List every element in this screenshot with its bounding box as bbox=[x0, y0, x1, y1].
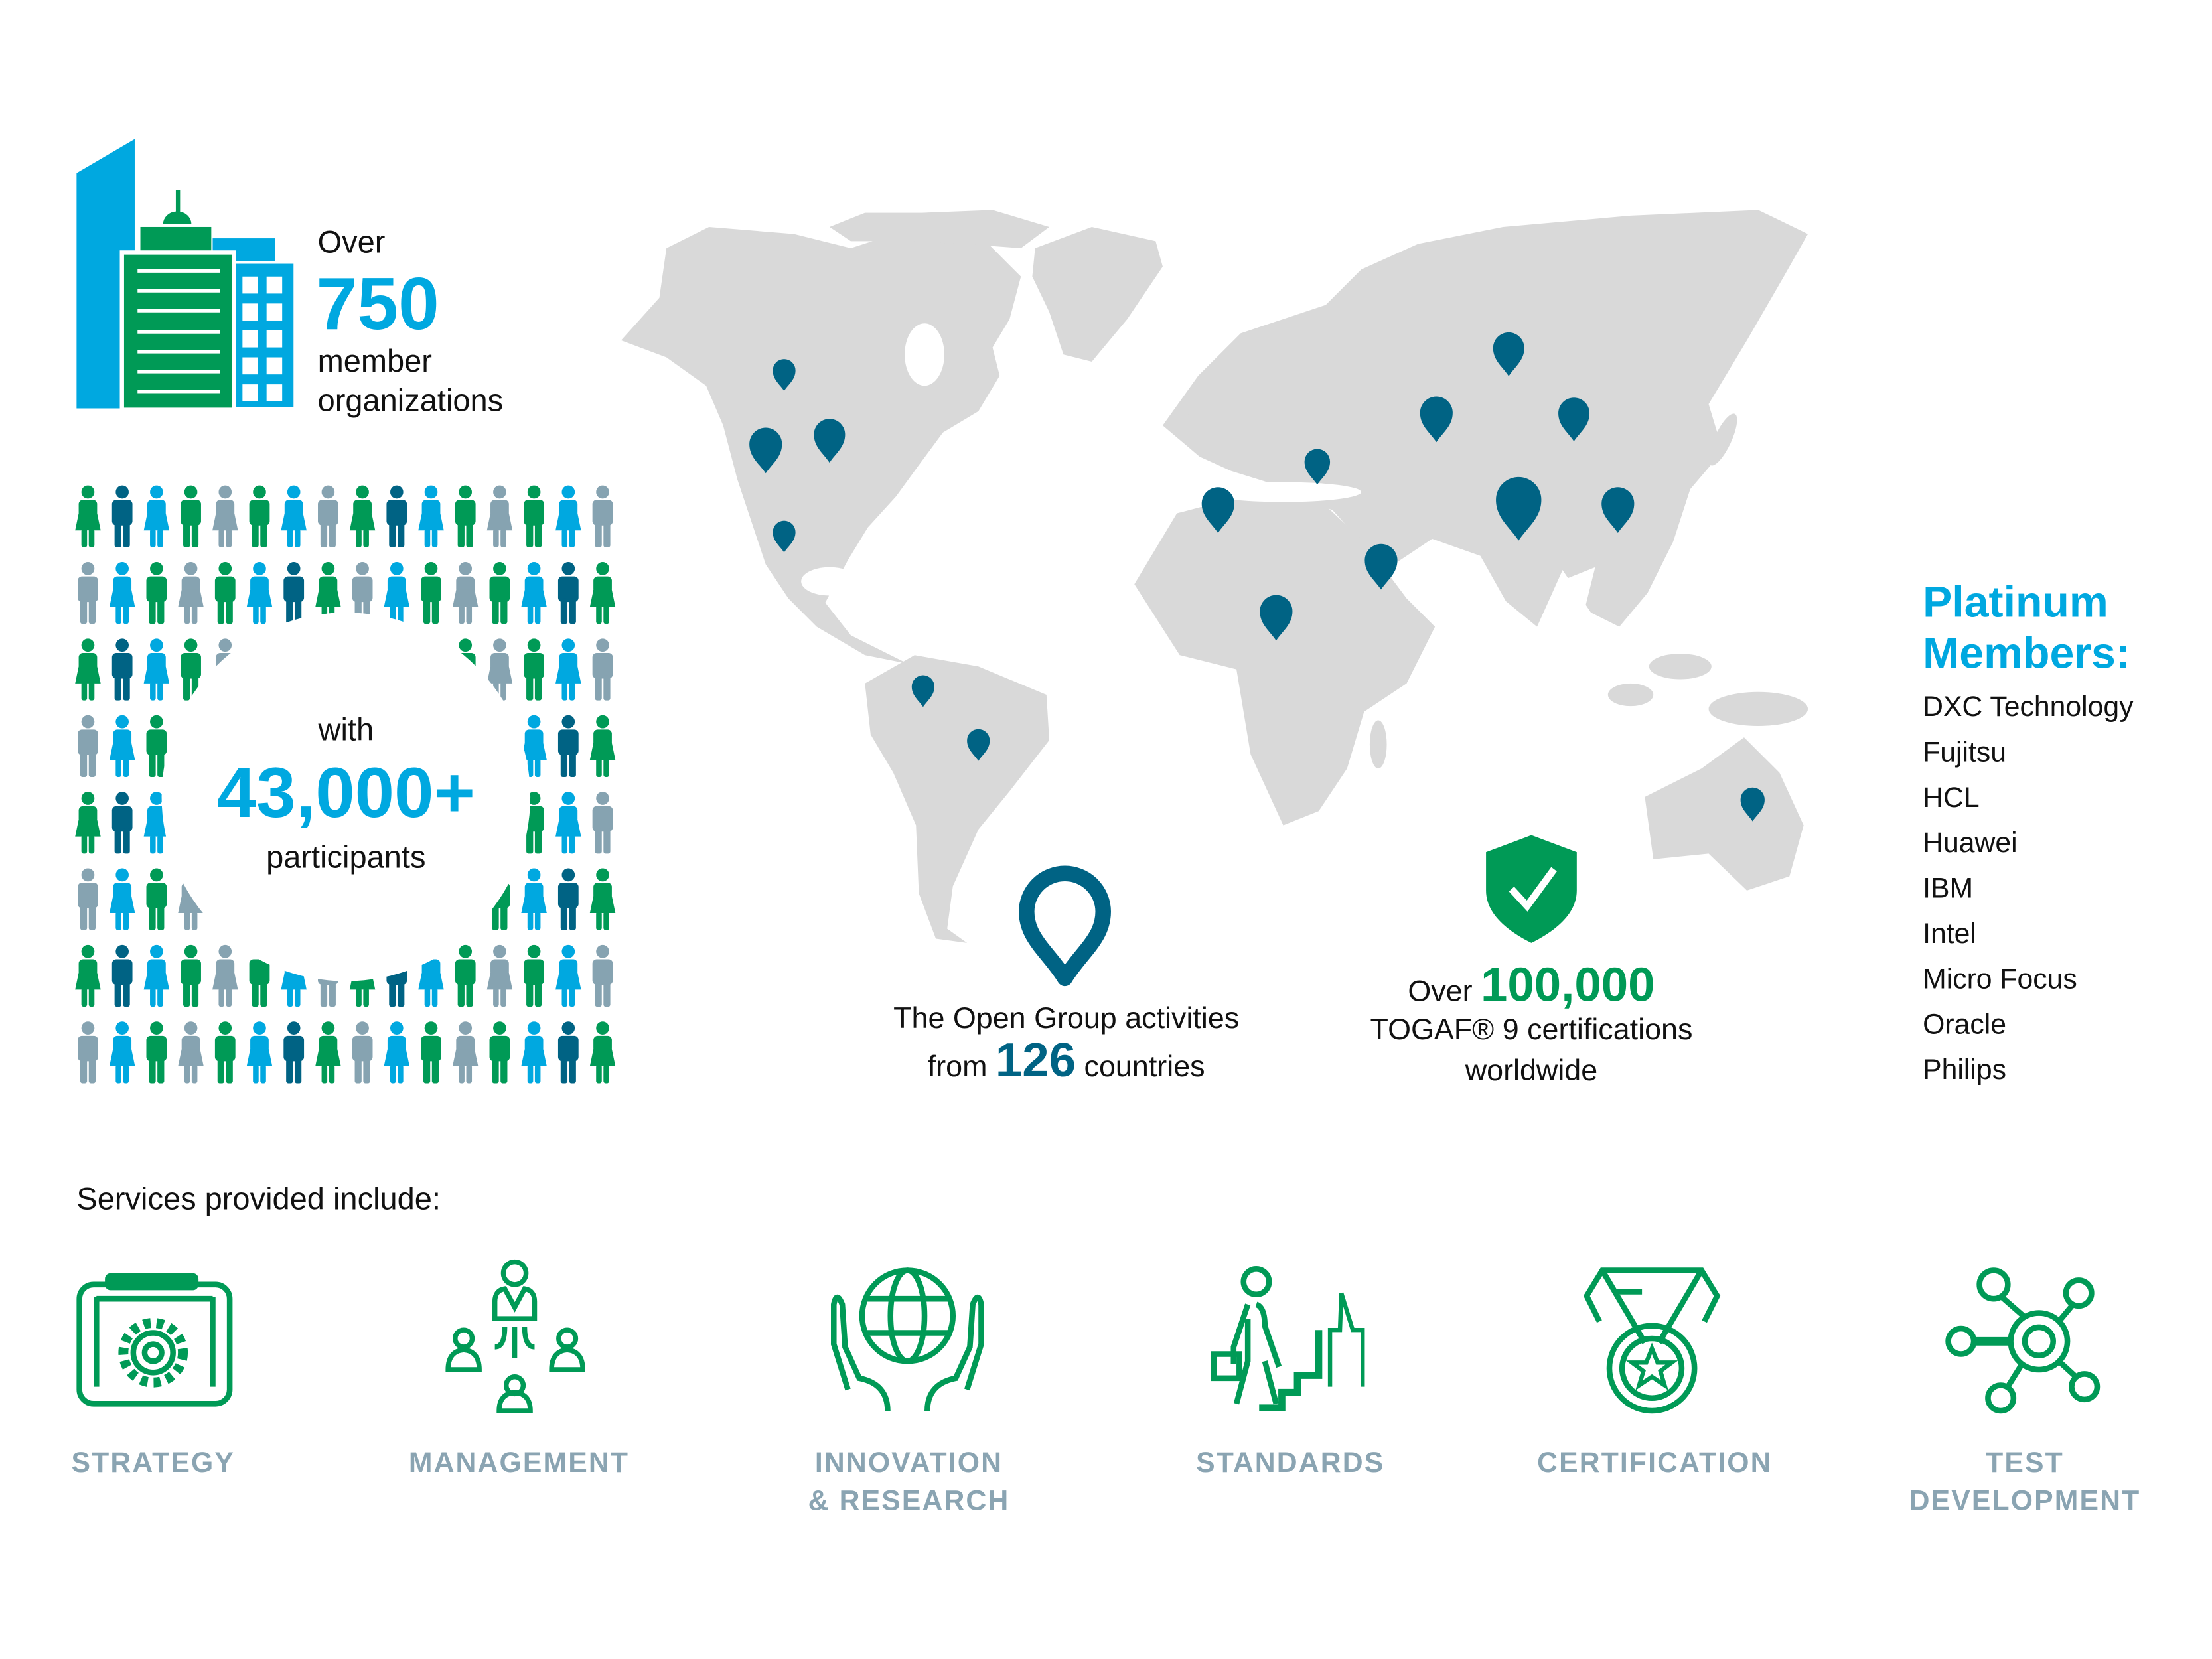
platinum members list: HCL bbox=[1923, 782, 1980, 814]
icon: shield check bbox=[1486, 835, 1577, 943]
platinum members list: DXC Technology bbox=[1923, 691, 2134, 723]
text: member organizations bbox=[316, 224, 503, 418]
service labels: & RESEARCH bbox=[808, 1485, 1009, 1517]
service labels bbox=[71, 1447, 2140, 1517]
icon: large location pin bbox=[1027, 873, 1103, 978]
text: member organizations: 750 bbox=[316, 262, 439, 345]
text: countries: from 126 countries bbox=[928, 1033, 1205, 1087]
platinum members list: Oracle bbox=[1923, 1009, 2006, 1041]
text: participants bbox=[217, 711, 475, 875]
icon: innovation globe hands bbox=[834, 1270, 981, 1411]
text: participants: participants bbox=[266, 839, 425, 875]
map pins bbox=[749, 332, 1765, 822]
service labels: STRATEGY bbox=[71, 1447, 235, 1479]
text: participants: with bbox=[318, 711, 374, 747]
platinum members list: IBM bbox=[1923, 873, 1973, 904]
text: certifications: Over 100,000 bbox=[1408, 958, 1655, 1012]
text: member organizations: member bbox=[318, 343, 432, 378]
icon: standards bbox=[1214, 1269, 1363, 1408]
icon: test development bbox=[1949, 1270, 2097, 1411]
platinum members list: Huawei bbox=[1923, 827, 2018, 859]
platinum members list: Intel bbox=[1923, 918, 1976, 950]
text: certifications bbox=[1370, 958, 1692, 1087]
service labels: MANAGEMENT bbox=[409, 1447, 629, 1479]
icon: strategy bbox=[80, 1276, 230, 1404]
text: member organizations: Over bbox=[318, 224, 385, 259]
text: countries: The Open Group activities bbox=[893, 1001, 1239, 1035]
people grid bbox=[75, 486, 615, 1083]
text: certifications: worldwide bbox=[1465, 1053, 1597, 1087]
platinum members list: Members: bbox=[1923, 628, 2130, 678]
icon: certification medal bbox=[1587, 1270, 1717, 1411]
world map bbox=[621, 210, 1808, 943]
platinum members list: Philips bbox=[1923, 1054, 2006, 1086]
platinum members list: Platinum bbox=[1923, 578, 2108, 627]
service labels: INNOVATION bbox=[815, 1447, 1003, 1479]
platinum members list: Micro Focus bbox=[1923, 963, 2077, 995]
icon: buildings bbox=[76, 139, 295, 410]
map seas (negative space) bbox=[801, 323, 1595, 631]
text: participants: 43,000+ bbox=[217, 753, 475, 832]
heading: services: Services provided include: bbox=[76, 1181, 441, 1216]
text: certifications: TOGAF® 9 certifications bbox=[1370, 1012, 1692, 1046]
text: member organizations: organizations bbox=[318, 383, 503, 418]
service labels: CERTIFICATION bbox=[1537, 1447, 1773, 1479]
platinum members list bbox=[1923, 578, 2134, 1086]
platinum members list: Fujitsu bbox=[1923, 736, 2006, 768]
icon: management bbox=[448, 1262, 583, 1411]
text: countries bbox=[893, 1001, 1239, 1087]
service labels: DEVELOPMENT bbox=[1909, 1485, 2140, 1517]
service labels: STANDARDS bbox=[1196, 1447, 1384, 1479]
service labels: TEST bbox=[1986, 1447, 2064, 1479]
